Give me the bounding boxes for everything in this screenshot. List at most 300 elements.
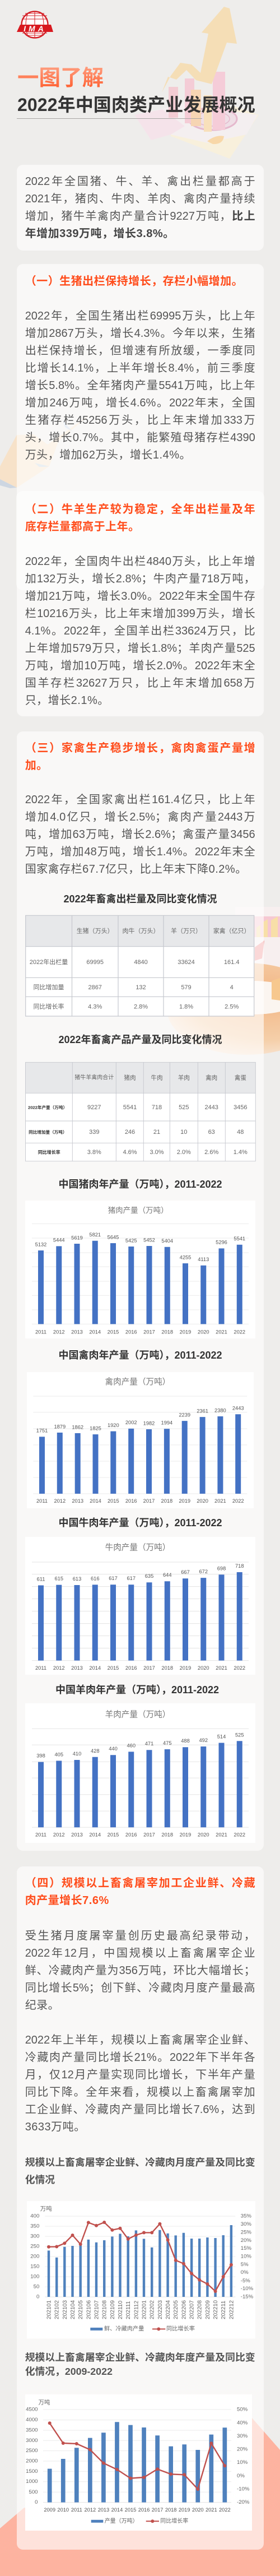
combo chart: monthly output and growth: 50 [33, 2284, 39, 2290]
table: products output [25, 1062, 256, 1161]
combo chart: monthly output and growth: 202112 [133, 2301, 139, 2319]
subtitle: monthly chart: 化情况 [25, 2174, 55, 2185]
combo chart: annual output and growth: 500 [29, 2489, 38, 2495]
text: section two: 加132万头，增长2.8%；牛肉产量718万吨， [25, 573, 255, 585]
bar chart: beef output: 718 [235, 1563, 244, 1569]
combo chart: monthly output and growth: 30% [240, 2221, 251, 2227]
combo chart: monthly output and growth: 202110 [118, 2301, 124, 2319]
bar chart: beef output: 2011 [35, 1665, 46, 1671]
combo chart: monthly output and growth: 350 [30, 2223, 39, 2230]
combo chart: annual output and growth: 40% [237, 2420, 248, 2426]
kicker heading: 一图了解: 一图了解 [17, 66, 104, 90]
table: slaughter volume: 2867 [88, 984, 102, 991]
bar chart: poultry output: 1982 [143, 1420, 155, 1426]
text: section two: 2022年，全国肉牛出栏4840万头，比上年增 [25, 555, 255, 568]
combo chart: monthly output and growth: 202205 [173, 2300, 179, 2319]
combo chart: annual output and growth: 30% [237, 2433, 248, 2439]
chart title: beef: 中国牛肉年产量（万吨），2011-2022 [58, 1517, 222, 1528]
bar chart: pork output: 2018 [161, 1329, 173, 1335]
text: section one: 比增长14.1%，上半年增长8.4%，前三季度 [25, 362, 255, 374]
heading: section two: 底存栏量都高于上年。 [25, 520, 140, 532]
subtitle: annual chart: 化情况，2009-2022 [25, 2366, 113, 2377]
bar chart: beef output: 611 [37, 1576, 45, 1582]
table: products output: 同比增长率 [38, 1149, 60, 1155]
table: products output: 10 [180, 1129, 187, 1136]
table: slaughter volume: 肉牛（万头） [122, 927, 159, 935]
combo chart: monthly output and growth: 0% [240, 2269, 249, 2276]
bar chart: mutton output: 398 [36, 1753, 45, 1759]
text: section two: 上年增加579万只，增长1.8%；羊肉产量525 [25, 642, 255, 655]
combo chart: monthly output and growth: 202106 [86, 2300, 92, 2319]
table: products output: 525 [179, 1104, 189, 1111]
combo chart: annual output and growth: 1000 [26, 2478, 38, 2485]
chart title: poultry: 中国禽肉年产量（万吨），2011-2022 [58, 1350, 222, 1361]
bar chart: beef output: 牛肉产量（万吨） [105, 1542, 170, 1552]
text: section one: 2022年，全国生猪出栏69995万头，比上年 [25, 310, 255, 322]
bar chart: pork output: 2015 [108, 1329, 119, 1335]
table: slaughter volume: 69995 [86, 959, 104, 966]
intro text: 增加，猪牛羊禽肉产量合计9227万吨，比上 [25, 210, 255, 222]
bar chart: pork output: 2022 [234, 1329, 245, 1335]
text: section two: 4.1%。2022年，全国羊出栏33624万只，比 [25, 625, 255, 637]
combo chart: monthly output and growth: 300 [30, 2234, 39, 2240]
combo chart: annual output and growth: 2022 [219, 2507, 231, 2513]
table: slaughter volume: 4 [230, 984, 234, 991]
bar chart: mutton output: 2020 [198, 1832, 209, 1838]
text: section one: 增长5.8%。全年猪肉产量5541万吨，比上年 [25, 379, 255, 392]
table: products output: 4.6% [123, 1149, 137, 1156]
combo chart: annual output and growth: 万吨 [39, 2398, 50, 2406]
combo chart: monthly output and growth: 250 [30, 2244, 39, 2250]
bar chart: poultry output: 2361 [197, 1408, 208, 1414]
text: section three: 增加4.0亿只，增长2.5%；禽肉产量2443万 [25, 811, 255, 823]
bar chart: pork output: 2011 [35, 1329, 46, 1335]
heading: section two: （二）牛羊生产较为稳定，全年出栏量及年 [25, 503, 255, 516]
combo chart: monthly output and growth: 万吨 [40, 2205, 52, 2212]
bar chart: beef output: 2016 [125, 1665, 137, 1671]
bar chart: poultry output: 2011 [36, 1498, 48, 1504]
combo chart: monthly output and growth: 202207 [189, 2300, 195, 2319]
combo chart: monthly output and growth: 鲜、冷藏肉产量 [104, 2325, 144, 2332]
combo chart: monthly output and growth: 202212 [228, 2300, 235, 2319]
bar chart: pork output: 5541 [234, 1236, 245, 1241]
text: December output: 纪录。 [25, 1999, 59, 2011]
combo chart: monthly output and growth: 202204 [165, 2300, 171, 2319]
combo chart: monthly output and growth: 同比增长率 [166, 2325, 195, 2332]
combo chart: annual output and growth: 0% [237, 2472, 245, 2478]
bar chart: beef output: 2019 [180, 1665, 191, 1671]
combo chart: monthly output and growth: -5% [240, 2278, 250, 2284]
intro text: 年增加339万吨，增长3.8%。 [25, 228, 175, 240]
bar chart: pork output [32, 1206, 249, 1335]
heading: section two [25, 503, 255, 532]
text: section two: 只，增长2.1%。 [25, 694, 109, 707]
subtitle: monthly chart [25, 2157, 255, 2185]
bar chart: poultry output: 2443 [232, 1405, 244, 1411]
combo chart: annual output and growth: 1500 [26, 2468, 38, 2474]
bar chart: beef output: 617 [109, 1576, 118, 1581]
bar chart: mutton output: 492 [199, 1738, 208, 1743]
bar chart: pork output: 5444 [53, 1238, 65, 1243]
subtitle: annual chart [25, 2352, 255, 2377]
bar chart: mutton output: 2018 [161, 1832, 173, 1838]
table: products output: 猪牛羊禽肉合计 [74, 1074, 114, 1081]
combo chart: monthly output and growth: 100 [30, 2274, 39, 2280]
text: full year output: 工企业鲜、冷藏肉产量同比增长7.6%，达到 [25, 2103, 255, 2115]
bar chart: poultry output [34, 1377, 247, 1504]
combo chart: monthly output and growth: 202103 [62, 2300, 68, 2319]
right decoration [235, 907, 280, 1013]
table: products output: 2.6% [204, 1149, 218, 1156]
bar chart: beef output: 2017 [143, 1665, 155, 1671]
combo chart: annual output and growth: 10% [237, 2459, 248, 2466]
bar chart: pork output: 2012 [53, 1329, 65, 1335]
bar chart: beef output: 635 [145, 1573, 153, 1579]
text: section three [25, 794, 255, 875]
bar chart: mutton output: 525 [235, 1732, 244, 1738]
combo chart: annual output and growth: -20% [237, 2499, 250, 2505]
table: products output: 63 [208, 1129, 215, 1136]
text: full year output: 3633万吨。 [25, 2121, 86, 2133]
bar chart: poultry output: 2239 [179, 1412, 190, 1417]
bar chart: pork output: 2021 [216, 1329, 227, 1335]
text: section one [25, 309, 255, 461]
bar chart: poultry output: 1825 [90, 1425, 101, 1431]
combo chart: annual output and growth: 同比增长率 [160, 2517, 188, 2524]
combo chart: monthly output and growth: 202105 [78, 2300, 84, 2319]
text: section one: 增加2867万头，增长4.3%。今年以来，生猪 [25, 327, 255, 340]
bar chart: beef output [32, 1542, 249, 1671]
bar chart: mutton output: 2017 [143, 1832, 155, 1838]
text: full year output [25, 2033, 255, 2133]
table: slaughter volume: 1.8% [179, 1003, 193, 1010]
table: products output: 9227 [87, 1104, 101, 1111]
bar chart: mutton output: 2011 [35, 1832, 46, 1838]
heading: section three: 加。 [25, 759, 48, 771]
combo chart: monthly output and growth: 0 [36, 2294, 39, 2300]
panel: slaughter enterprises [17, 1866, 264, 2550]
heading: section three [25, 742, 255, 771]
bar chart: poultry output: 2020 [197, 1498, 208, 1504]
combo chart: annual output and growth: 2012 [85, 2507, 96, 2513]
table: products output: 2022年产量（万吨） [28, 1104, 67, 1110]
combo chart: annual output and growth: 0 [35, 2499, 38, 2505]
panel: intro summary [17, 165, 264, 251]
combo chart: monthly output and growth: 202210 [213, 2300, 219, 2319]
bar chart: poultry output: 2014 [90, 1498, 101, 1504]
combo chart: annual output and growth: 2018 [165, 2507, 176, 2513]
table: products output: 48 [237, 1129, 244, 1136]
bar chart: beef output: 613 [73, 1576, 81, 1582]
table: products output: 猪肉 [124, 1074, 136, 1082]
subtitle: annual chart: 规模以上畜禽屠宰企业鲜、冷藏肉年度产量及同比变 [25, 2352, 255, 2363]
bar chart: beef output: 2014 [89, 1665, 101, 1671]
combo chart: annual output and growth: 2000 [26, 2458, 38, 2464]
table: slaughter volume: 同比增长率 [34, 1002, 64, 1010]
table: slaughter volume: 2.5% [225, 1003, 239, 1010]
text: December output: 受生猪月度屠宰量创历史最高纪录带动， [25, 1929, 255, 1942]
bar chart: beef output: 644 [163, 1572, 172, 1578]
bar chart: pork output: 5452 [143, 1238, 155, 1243]
table: slaughter volume: 家禽（亿只） [213, 927, 250, 935]
bar chart: beef output: 2021 [216, 1665, 227, 1671]
combo chart: monthly output and growth: 5% [240, 2262, 249, 2268]
text: full year output: 同比下降。全年来看，规模以上畜禽屠宰加 [25, 2086, 255, 2098]
bar chart: beef output: 2015 [108, 1665, 119, 1671]
bar chart: pork output: 4113 [198, 1257, 209, 1262]
table: slaughter volume: 同比增加量 [34, 983, 64, 991]
combo chart: monthly output and growth: 202201 [141, 2300, 147, 2319]
bar chart: beef output: 616 [91, 1576, 100, 1581]
table: products output: 246 [125, 1129, 135, 1136]
intro text [25, 175, 255, 240]
text: section three: 2022年，全国家禽出栏161.4亿只，比上年 [25, 794, 255, 806]
bar chart: mutton output: 2016 [125, 1832, 137, 1838]
combo chart: monthly output and growth: 35% [240, 2213, 251, 2220]
bar chart: pork output: 2014 [89, 1329, 101, 1335]
table: products output: 5541 [123, 1104, 137, 1111]
bar chart: beef output: 672 [199, 1569, 208, 1574]
table: products output: 3.0% [150, 1149, 164, 1156]
bar chart: poultry output: 1994 [161, 1420, 172, 1425]
bar chart: beef output: 2013 [71, 1665, 83, 1671]
logo [17, 11, 53, 39]
bar chart: beef output: 2018 [161, 1665, 173, 1671]
text: section two: 万吨，增加10万吨，增长2.0%。2022年末全 [25, 660, 255, 672]
main title: 2022年中国肉类产业发展概况 [17, 95, 255, 115]
bar chart: beef output: 2012 [53, 1665, 65, 1671]
combo chart: monthly output and growth: 202102 [54, 2300, 60, 2319]
panel: pigs, cattle and sheep [17, 264, 264, 716]
table: products output: 21 [153, 1129, 160, 1136]
bar chart: poultry output: 2002 [125, 1420, 137, 1425]
bar chart: pork output: 2019 [180, 1329, 191, 1335]
text: section one: 头，增长0.7%。其中，能繁殖母猪存栏4390 [25, 432, 255, 444]
bar chart: pork output: 5425 [125, 1238, 137, 1244]
bar chart: mutton output: 410 [73, 1751, 81, 1757]
bar chart: beef output: 2020 [198, 1665, 209, 1671]
combo chart: annual output and growth: 3500 [26, 2427, 38, 2433]
bar chart: mutton output: 475 [163, 1740, 172, 1746]
text: section two [25, 555, 255, 707]
bar chart: poultry output: 禽肉产量（万吨） [105, 1377, 170, 1387]
bar chart: mutton output: 2022 [234, 1832, 245, 1838]
bar chart: pork output: 5645 [108, 1235, 119, 1240]
bar chart: mutton output: 2013 [71, 1832, 83, 1838]
combo chart: annual output and growth: 2017 [152, 2507, 163, 2513]
combo chart: annual output and growth: 2011 [71, 2507, 82, 2513]
bar chart: pork output: 4255 [180, 1255, 191, 1261]
combo chart: annual output and growth: -10% [237, 2486, 250, 2492]
table: slaughter volume: 生猪（万头） [77, 927, 114, 935]
chart title: mutton: 中国羊肉年产量（万吨），2011-2022 [55, 1684, 219, 1695]
table title: products output: 2022年畜禽产品产量及同比变化情况 [58, 1034, 222, 1045]
combo chart: annual output and growth: 2500 [26, 2448, 38, 2454]
intro text: 2022年全国猪、牛、羊、禽出栏量都高于 [25, 175, 255, 187]
bar chart: poultry output: 2012 [54, 1498, 66, 1504]
combo chart: annual output and growth: 4500 [26, 2406, 38, 2412]
combo chart: monthly output and growth: 400 [30, 2213, 39, 2220]
heading: section one: （一）生猪出栏保持增长，存栏小幅增加。 [25, 275, 243, 287]
bar chart: poultry output: 2021 [214, 1498, 226, 1504]
text: section two: 增加21万吨，增长3.0%。2022年末全国牛存 [25, 590, 255, 603]
bar chart: poultry output: 2015 [108, 1498, 119, 1504]
header bars [169, 87, 178, 118]
combo chart: monthly output and growth: 25% [240, 2230, 251, 2236]
table: slaughter volume: 2.8% [134, 1003, 148, 1010]
combo chart: monthly output and growth: 202101 [46, 2300, 52, 2319]
text: section three: 吨，增加63万吨，增长2.6%；禽蛋产量3456 [25, 828, 255, 841]
chart title: pork: 中国猪肉年产量（万吨），2011-2022 [58, 1179, 222, 1190]
text: section two: 栏10216万头，比上年末增加399万头，增长 [25, 608, 255, 620]
table: products output: 3456 [234, 1104, 248, 1111]
text: section one: 出栏保持增长，但增速有所放缓，一季度同 [25, 345, 255, 357]
bar chart: mutton output: 514 [217, 1734, 226, 1740]
combo chart: monthly output and growth: 20% [240, 2237, 251, 2244]
text: December output: 鲜、冷藏肉产量为356万吨，环比大幅增长； [25, 1964, 255, 1976]
bar chart: poultry output: 2016 [125, 1498, 137, 1504]
combo chart: annual output and growth: 2016 [138, 2507, 150, 2513]
text: section three: 万吨，增加48万吨，增长1.4%。2022年末全 [25, 846, 255, 858]
bar chart: mutton output [32, 1709, 249, 1838]
text: section one: 增加246万吨，增长4.6%。2022年末，全国 [25, 397, 255, 409]
combo chart: annual output and growth: 2014 [111, 2507, 123, 2513]
salmon footer [0, 2418, 280, 2576]
table: slaughter volume: 4.3% [88, 1003, 102, 1010]
text: December output: 同比增长5%；创下鲜、冷藏肉月度产量最高 [25, 1982, 255, 1994]
table: slaughter volume: 132 [136, 984, 146, 991]
combo chart: monthly output and growth [30, 2205, 253, 2332]
table: slaughter volume: 羊（万只） [171, 927, 202, 935]
combo chart: monthly output and growth: 202104 [70, 2300, 76, 2319]
bar chart: poultry output: 2018 [161, 1498, 172, 1504]
table: slaughter volume: 33624 [178, 959, 195, 966]
table: products output: 禽肉 [206, 1074, 217, 1082]
combo chart: monthly output and growth: -15% [240, 2294, 253, 2300]
combo chart: annual output and growth: 20% [237, 2446, 248, 2452]
combo chart: annual output and growth: 4000 [26, 2417, 38, 2423]
intro text: 2021年，猪肉、牛肉、羊肉、禽肉产量持续 [25, 193, 255, 205]
combo chart: annual output and growth: 2021 [206, 2507, 217, 2513]
table: products output: 3.8% [87, 1149, 101, 1156]
table: products output: 羊肉 [178, 1074, 190, 1082]
bar chart: mutton output: 428 [91, 1748, 100, 1754]
text: section two: 国羊存栏32627万只，比上年末增加658万 [25, 677, 255, 689]
combo chart: monthly output and growth: -10% [240, 2286, 253, 2292]
heading: section four [25, 1877, 255, 1907]
bar chart: pork output: 2020 [198, 1329, 209, 1335]
bar chart: mutton output: 440 [109, 1746, 118, 1752]
text: December output: 2022年12月，中国规模以上畜禽屠宰企业 [25, 1947, 255, 1959]
combo chart: annual output and growth: 50% [237, 2406, 248, 2412]
combo chart: annual output and growth: 2020 [192, 2507, 204, 2513]
combo chart: monthly output and growth: 202111 [125, 2301, 132, 2319]
combo chart: monthly output and growth: 202109 [110, 2300, 116, 2319]
combo chart: annual output and growth [25, 2398, 252, 2531]
bar chart: beef output: 667 [181, 1569, 190, 1575]
bar chart: pork output: 2013 [71, 1329, 83, 1335]
combo chart: monthly output and growth: 202107 [94, 2300, 100, 2319]
bar chart: pork output: 5821 [89, 1232, 101, 1238]
combo chart: monthly output and growth: 202206 [181, 2300, 187, 2319]
heading: section four: （四）规模以上畜禽屠宰加工企业鲜、冷藏 [25, 1877, 255, 1889]
text: full year output: 冷藏肉产量同比增长21%。2022年下半年各 [25, 2051, 255, 2064]
combo chart: annual output and growth: 产量（万吨） [105, 2517, 138, 2524]
bar chart: mutton output: 2012 [53, 1832, 65, 1838]
heading: section three: （三）家禽生产稳步增长，禽肉禽蛋产量增 [25, 742, 255, 754]
combo chart: monthly output and growth: 202211 [221, 2301, 227, 2319]
bar chart: mutton output: 羊肉产量（万吨） [105, 1709, 170, 1719]
combo chart: monthly output and growth: 150 [30, 2264, 39, 2270]
combo chart: monthly output and growth: 202108 [101, 2300, 108, 2319]
combo chart: annual output and growth: 2013 [98, 2507, 109, 2513]
header paper sheets [168, 106, 259, 159]
bar chart: beef output: 617 [127, 1576, 136, 1581]
table: products output: 牛肉 [151, 1074, 163, 1082]
table: slaughter volume [25, 915, 254, 1017]
logo: IMA [24, 24, 46, 33]
table: slaughter volume: 2022年出栏量 [30, 958, 68, 966]
heading: section four: 肉产量增长7.6% [25, 1894, 109, 1907]
bar chart: pork output: 5132 [35, 1242, 46, 1248]
combo chart: monthly output and growth: 202209 [205, 2300, 211, 2319]
combo chart: monthly output and growth: 200 [30, 2254, 39, 2260]
combo chart: annual output and growth: 2009 [44, 2507, 55, 2513]
text: full year output: 2022年上半年，规模以上畜禽屠宰企业鲜、 [25, 2033, 255, 2046]
bar chart: poultry output: 2019 [179, 1498, 190, 1504]
bar chart: poultry output: 2022 [232, 1498, 244, 1504]
subtitle: monthly chart: 规模以上畜禽屠宰企业鲜、冷藏肉月度产量及同比变 [25, 2157, 255, 2168]
bar chart: pork output: 2017 [143, 1329, 155, 1335]
bar chart: poultry output: 1920 [108, 1423, 119, 1428]
bar chart: beef output: 2022 [234, 1665, 245, 1671]
combo chart: monthly output and growth: 10% [240, 2254, 251, 2260]
panel: poultry, tables and annual charts [17, 731, 264, 1851]
bar chart: poultry output: 2017 [143, 1498, 155, 1504]
combo chart: monthly output and growth: 202208 [197, 2300, 203, 2319]
table: products output: 2.0% [177, 1149, 191, 1156]
bar chart: poultry output: 1862 [72, 1424, 83, 1430]
bar chart: poultry output: 1751 [36, 1428, 48, 1433]
combo chart: annual output and growth: 2019 [179, 2507, 190, 2513]
bar chart: poultry output: 2380 [214, 1407, 226, 1413]
bar chart: pork output: 猪肉产量（万吨） [108, 1206, 169, 1215]
combo chart: monthly output and growth: 202203 [157, 2300, 164, 2319]
table: slaughter volume: 161.4 [224, 959, 239, 966]
bar chart: poultry output: 2013 [72, 1498, 83, 1504]
text: full year output: 月，仅12月产量实现同比增长，下半年产量 [25, 2068, 255, 2081]
bar chart: pork output: 5296 [216, 1240, 227, 1245]
table: products output: 同比增加量（万吨） [29, 1129, 67, 1134]
text: section one: 万头，增加62万头，增长1.4%。 [25, 449, 191, 461]
bar chart: mutton output: 2014 [89, 1832, 101, 1838]
bar chart: beef output: 615 [54, 1576, 63, 1581]
left decoration [0, 414, 91, 488]
bar chart: beef output: 698 [217, 1565, 226, 1571]
bar chart: pork output: 2016 [125, 1329, 137, 1335]
combo chart: annual output and growth: 3000 [26, 2437, 38, 2443]
combo chart: monthly output and growth: 202202 [149, 2300, 155, 2319]
bar chart: mutton output: 460 [127, 1743, 136, 1748]
table: products output: 2443 [204, 1104, 218, 1111]
bar chart: pork output: 5404 [161, 1238, 173, 1244]
bar chart: pork output: 5619 [71, 1235, 83, 1241]
combo chart: annual output and growth: 2015 [125, 2507, 136, 2513]
bar chart: mutton output: 488 [181, 1738, 190, 1744]
table: slaughter volume: 579 [181, 984, 192, 991]
combo chart: annual output and growth: 2010 [57, 2507, 69, 2513]
table: slaughter volume: 4840 [134, 959, 148, 966]
